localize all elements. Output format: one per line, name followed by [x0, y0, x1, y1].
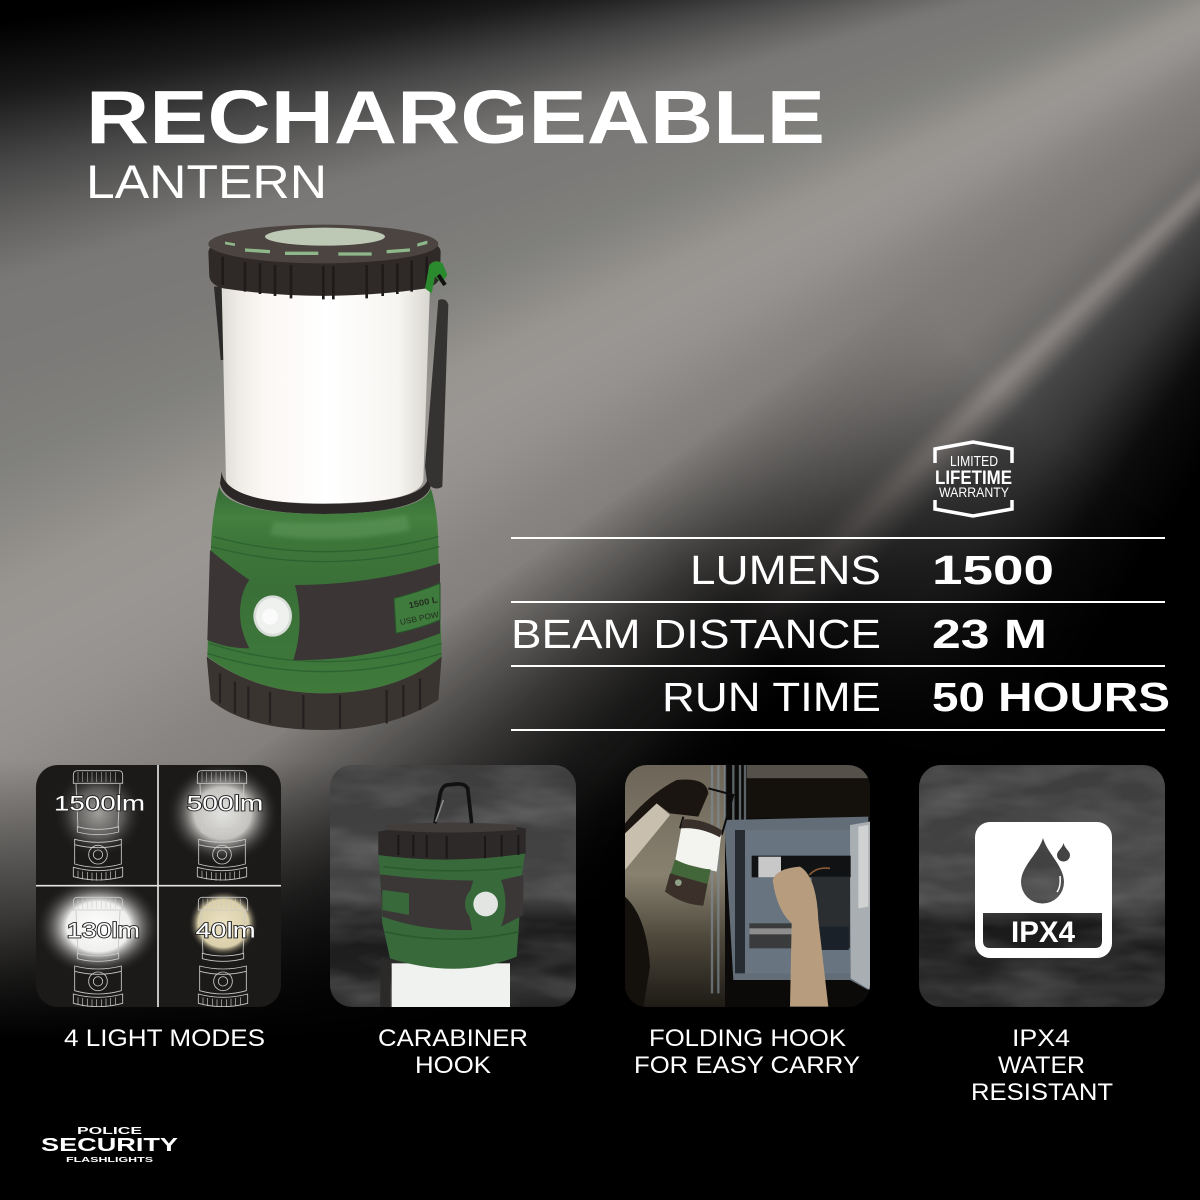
- spec row: run time: RUN TIME: [662, 674, 881, 720]
- globe: [222, 287, 430, 503]
- panel: 4 light modes: 40lm: [196, 918, 256, 942]
- electrical box: [724, 817, 868, 990]
- panel: carabiner hook: [330, 765, 576, 1008]
- cap: [378, 823, 526, 860]
- green body: [207, 487, 442, 693]
- brand logo: POLICE: [77, 1126, 143, 1137]
- rubber band: [380, 874, 473, 930]
- title: LANTERN: [86, 155, 327, 208]
- warranty badge: LIFETIME: [935, 468, 1012, 489]
- person silhouette: [625, 897, 650, 1008]
- wooden wall: [625, 765, 725, 1008]
- warranty badge: WARRANTY: [939, 484, 1010, 500]
- caption: folding hook: FOLDING HOOK: [649, 1025, 846, 1052]
- green clip: [425, 261, 447, 293]
- icon: IPX4 water drop: IPX4: [1011, 916, 1075, 949]
- spec table: [511, 538, 1170, 730]
- cap: [208, 225, 441, 299]
- title: RECHARGEABLE: [86, 75, 825, 159]
- caption: folding hook: [634, 1025, 860, 1079]
- black rubber band: [207, 550, 440, 660]
- caption: carabiner hook: HOOK: [415, 1052, 491, 1079]
- caption: IPX4 water resistant: WATER: [998, 1052, 1085, 1079]
- panel: 4 light modes: 1500lm: [54, 791, 145, 815]
- panel: 4 light modes: 500lm: [187, 791, 263, 815]
- caption: 4 light modes: 4 LIGHT MODES: [64, 1025, 265, 1052]
- caption: IPX4 water resistant: [971, 1025, 1113, 1106]
- model plate: USB POW: [399, 610, 440, 627]
- warranty badge: [935, 442, 1012, 516]
- carabiner: [435, 784, 472, 823]
- model plate: [394, 583, 440, 633]
- caption: IPX4 water resistant: IPX4: [1012, 1025, 1070, 1052]
- product image: lantern: [207, 225, 448, 730]
- right arm and hand: [773, 867, 828, 1007]
- conduits: [712, 765, 745, 993]
- title: [86, 75, 825, 208]
- bottom ring: [207, 657, 442, 730]
- spec row: lumens: 1500: [932, 547, 1054, 593]
- panel: 4 light modes: [35, 762, 282, 1008]
- brand logo: FLASHLIGHTS: [66, 1155, 153, 1164]
- spec row: lumens: LUMENS: [690, 547, 881, 593]
- spec row: beam distance: BEAM DISTANCE: [511, 611, 881, 657]
- brand logo: [41, 1126, 178, 1164]
- green body: [378, 853, 525, 969]
- power button: [253, 595, 292, 637]
- icon: IPX4 water drop: [975, 822, 1112, 958]
- caption: folding hook: FOR EASY CARRY: [634, 1052, 860, 1079]
- spec row: beam distance: [511, 611, 1047, 657]
- panel: folding hook photo: [625, 765, 870, 1008]
- globe: [392, 963, 510, 1008]
- folding handle: [680, 788, 733, 835]
- spec row: run time: 50 HOURS: [932, 674, 1170, 720]
- warranty badge: LIMITED: [950, 453, 998, 470]
- model plate: 1500 L: [408, 594, 439, 610]
- caption: IPX4 water resistant: RESISTANT: [971, 1079, 1113, 1106]
- left arm: [625, 803, 670, 870]
- lower collar ring: [220, 472, 431, 514]
- handle: [380, 957, 390, 1008]
- panel: water resistance: [919, 765, 1165, 1007]
- panel: 4 light modes: 130lm: [67, 918, 140, 942]
- spec row: run time: [662, 674, 1170, 720]
- brand logo: SECURITY: [41, 1135, 178, 1155]
- caption: carabiner hook: CARABINER: [378, 1025, 528, 1052]
- left handle: [214, 287, 224, 360]
- handle: [425, 299, 448, 489]
- spec row: beam distance: 23 M: [932, 611, 1047, 657]
- caption: carabiner hook: [378, 1025, 528, 1079]
- spec row: lumens: [690, 547, 1054, 593]
- button: [465, 890, 470, 916]
- small lantern: [675, 820, 722, 872]
